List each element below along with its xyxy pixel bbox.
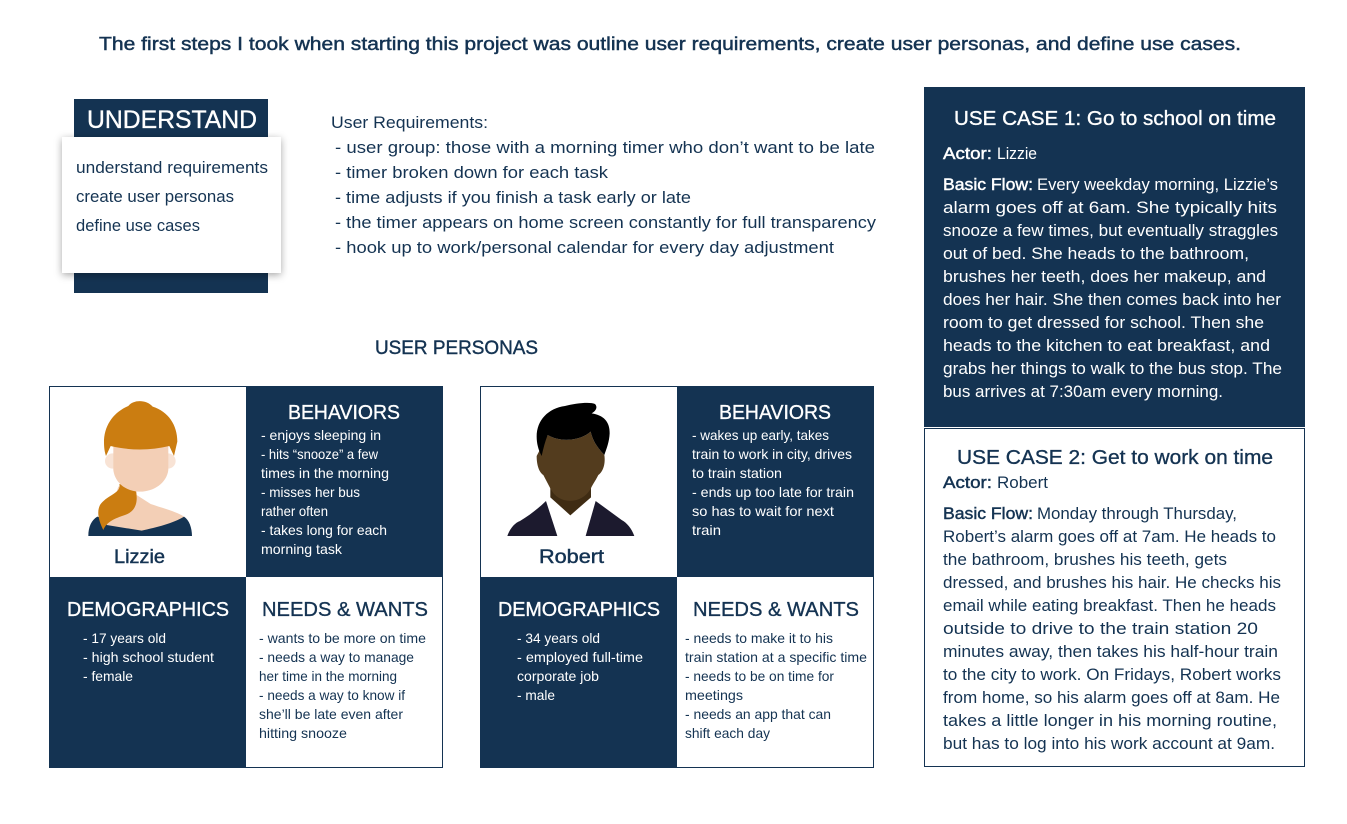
Robert behaviors: to train station bbox=[692, 465, 782, 481]
Lizzie name: Lizzie bbox=[114, 547, 165, 568]
Lizzie needs and wants: NEEDS & WANTS bbox=[262, 599, 428, 621]
Lizzie needs and wants: hitting snooze bbox=[259, 725, 347, 741]
Robert needs and wants: NEEDS & WANTS bbox=[693, 599, 859, 621]
Lizzie demographics bbox=[67, 599, 229, 684]
user requirements text block bbox=[331, 113, 877, 257]
Lizzie behaviors: morning task bbox=[261, 541, 343, 557]
user requirements text block: - the timer appears on home screen constantly for full transparency bbox=[335, 213, 877, 232]
panel: understand bbox=[62, 99, 281, 293]
use case 2 body text: to the city to work. On Fridays, Robert works bbox=[943, 665, 1281, 684]
user requirements text block: - hook up to work/personal calendar for every day adjustment bbox=[335, 238, 834, 257]
Robert demographics: - employed full-time bbox=[517, 649, 643, 665]
use case 2 body text: minutes away, then takes his half-hour train bbox=[943, 642, 1278, 661]
Robert demographics: - male bbox=[517, 687, 555, 703]
Robert needs and wants: meetings bbox=[685, 687, 743, 703]
use case 1 body text: Basic Flow: bbox=[943, 175, 1033, 194]
Lizzie needs and wants: - wants to be more on time bbox=[259, 630, 426, 646]
Robert behaviors: so has to wait for next bbox=[692, 503, 834, 519]
Robert needs and wants: - needs to make it to his bbox=[685, 630, 833, 646]
Robert demographics: corporate job bbox=[517, 668, 599, 684]
Lizzie behaviors: rather often bbox=[261, 503, 328, 519]
use case 1 body text: does her hair. She then comes back into her bbox=[943, 290, 1281, 309]
Lizzie behaviors: - misses her bus bbox=[261, 484, 360, 500]
Lizzie demographics: - 17 years old bbox=[83, 630, 166, 646]
Robert demographics: DEMOGRAPHICS bbox=[498, 599, 660, 621]
Lizzie needs and wants bbox=[259, 599, 428, 741]
use case 2 body text: but has to log into his work account at 9am. bbox=[943, 734, 1275, 753]
Lizzie behaviors: - enjoys sleeping in bbox=[261, 427, 381, 443]
use case 1 body text: grabs her things to walk to the bus stop. The bbox=[943, 359, 1282, 378]
understand navy card bbox=[74, 99, 268, 293]
use case 1 body text: bus arrives at 7:30am every morning. bbox=[943, 382, 1223, 401]
use case 1 body text: brushes her teeth, does her makeup, and bbox=[943, 267, 1266, 286]
use case 1 heading: USE CASE 1: Go to school on time bbox=[954, 108, 1276, 130]
Robert needs and wants: - needs an app that can bbox=[685, 706, 831, 722]
use case 2 body text: Actor: bbox=[943, 473, 992, 492]
understand step list bbox=[76, 158, 268, 235]
Robert behaviors: - ends up too late for train bbox=[692, 484, 854, 500]
use case 2 body text: Robert bbox=[997, 473, 1048, 492]
Robert behaviors bbox=[692, 402, 854, 538]
user requirements text block: - user group: those with a morning timer who don’t want to be late bbox=[335, 138, 875, 157]
use case 2 body text: Robert’s alarm goes off at 7am. He heads to bbox=[943, 527, 1276, 546]
use case 1 body text: Every weekday morning, Lizzie’s bbox=[1037, 175, 1278, 194]
use case 1 body text: Lizzie bbox=[997, 144, 1037, 163]
understand step list: create user personas bbox=[76, 187, 234, 206]
understand heading: UNDERSTAND bbox=[87, 106, 257, 134]
understand step list: define use cases bbox=[76, 216, 200, 235]
Robert behaviors: - wakes up early, takes bbox=[692, 427, 829, 443]
Lizzie behaviors: - hits “snooze” a few bbox=[261, 446, 379, 462]
Robert behaviors: train to work in city, drives bbox=[692, 446, 852, 462]
use case 2 body text: Monday through Thursday, bbox=[1037, 504, 1237, 523]
Lizzie needs and wants: she’ll be late even after bbox=[259, 706, 403, 722]
use case 1 body text bbox=[943, 144, 1282, 401]
Robert behaviors: BEHAVIORS bbox=[719, 402, 831, 424]
use case 1 body text: room to get dressed for school. Then she bbox=[943, 313, 1264, 332]
Lizzie demographics: - high school student bbox=[83, 649, 214, 665]
understand white card bbox=[62, 137, 281, 273]
user requirements text block: - timer broken down for each task bbox=[335, 163, 609, 182]
user requirements text block: User Requirements: bbox=[331, 113, 488, 132]
use case 1 body text: alarm goes off at 6am. She typically hits bbox=[943, 198, 1277, 217]
panel: use case 1 bbox=[924, 87, 1305, 427]
Lizzie behaviors: times in the morning bbox=[261, 465, 389, 481]
Lizzie needs and wants: her time in the morning bbox=[259, 668, 397, 684]
panel: Lizzie persona bbox=[49, 386, 443, 768]
use case 2 body text: dressed, and brushes his hair. He checks his bbox=[943, 573, 1281, 592]
use case 2 body text bbox=[943, 473, 1281, 753]
Lizzie behaviors: BEHAVIORS bbox=[288, 402, 400, 424]
Robert needs and wants: shift each day bbox=[685, 725, 770, 741]
use case 2 body text: Basic Flow: bbox=[943, 504, 1033, 523]
use case 1 body text: out of bed. She heads to the bathroom, bbox=[943, 244, 1249, 263]
use case 2 body text: outside to drive to the train station 20 bbox=[943, 619, 1258, 638]
use case 2 heading: USE CASE 2: Get to work on time bbox=[957, 447, 1273, 469]
Robert needs and wants bbox=[685, 599, 867, 741]
Lizzie behaviors bbox=[261, 402, 400, 557]
Robert demographics bbox=[498, 599, 660, 703]
Robert demographics: - 34 years old bbox=[517, 630, 600, 646]
Robert needs and wants: - needs to be on time for bbox=[685, 668, 834, 684]
panel: use case 2 bbox=[924, 428, 1304, 766]
Lizzie behaviors: - takes long for each bbox=[261, 522, 387, 538]
use case 2 body text: email while eating breakfast. Then he heads bbox=[943, 596, 1276, 615]
use case 1 body text: heads to the kitchen to eat breakfast, and bbox=[943, 336, 1270, 355]
use case 1 body text: Actor: bbox=[943, 144, 992, 163]
use case 2 body text: from home, so his alarm goes off at 8am. He bbox=[943, 688, 1280, 707]
Lizzie demographics: DEMOGRAPHICS bbox=[67, 599, 229, 621]
Lizzie needs and wants: - needs a way to manage bbox=[259, 649, 414, 665]
use case 2 body text: the bathroom, brushes his teeth, gets bbox=[943, 550, 1227, 569]
use case 2 body text: takes a little longer in his morning routine, bbox=[943, 711, 1277, 730]
user personas heading: USER PERSONAS bbox=[375, 338, 538, 359]
icon: Robert avatar bbox=[507, 403, 634, 536]
use case 1 body text: snooze a few times, but eventually straggles bbox=[943, 221, 1278, 240]
Robert needs and wants: train station at a specific time bbox=[685, 649, 867, 665]
panel: Robert persona bbox=[480, 386, 874, 768]
understand step list: understand requirements bbox=[76, 158, 268, 177]
Robert name: Robert bbox=[539, 547, 605, 568]
user requirements text block: - time adjusts if you finish a task early or late bbox=[335, 188, 691, 207]
Lizzie needs and wants: - needs a way to know if bbox=[259, 687, 405, 703]
Robert behaviors: train bbox=[692, 522, 721, 538]
Lizzie demographics: - female bbox=[83, 668, 133, 684]
title: The first steps I took when starting this project was outline user requirements, create user personas, and define use cases. bbox=[99, 34, 1241, 54]
icon: Lizzie avatar bbox=[88, 401, 192, 536]
